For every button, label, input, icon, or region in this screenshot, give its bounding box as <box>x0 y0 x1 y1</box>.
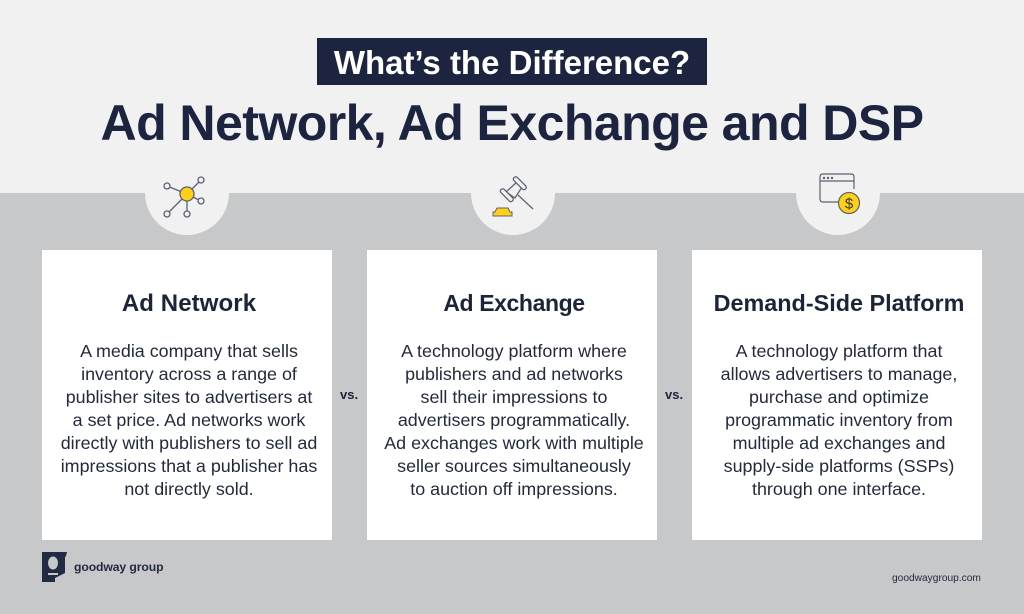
main title: Ad Network, Ad Exchange and DSP <box>101 95 923 151</box>
website url: goodwaygroup.com <box>892 573 981 584</box>
heading: ad exchange: Ad Exchange <box>443 290 585 316</box>
text: ad exchange description: A technology platform where <box>401 341 627 361</box>
text: ad network description: inventory across a range of <box>81 364 297 384</box>
header band <box>0 0 1024 193</box>
text: dsp description <box>721 341 957 499</box>
icon: browser with dollar coin: $ <box>845 196 854 212</box>
icon: network <box>145 176 229 235</box>
heading: demand-side platform: Demand-Side Platform <box>714 290 964 316</box>
panel: ad exchange <box>367 250 657 540</box>
text: dsp description: purchase and optimize <box>749 387 929 407</box>
text: ad network description: a set price. Ad networks work <box>73 410 305 430</box>
text: ad exchange description: seller sources simultaneously <box>397 456 631 476</box>
text: ad network description: publisher sites to advertisers at <box>66 387 312 407</box>
text: ad exchange description: Ad exchanges work with multiple <box>384 433 644 453</box>
text: ad network description: A media company that sells <box>80 341 298 361</box>
text: ad network description <box>61 341 317 499</box>
text: ad exchange description: sell their impressions to <box>421 387 607 407</box>
text: dsp description: multiple ad exchanges and <box>733 433 945 453</box>
text: ad exchange description <box>384 341 644 499</box>
icon: gavel <box>471 176 555 235</box>
text: dsp description: programmatic inventory from <box>725 410 953 430</box>
text: dsp description: through one interface. <box>752 479 926 499</box>
icon: browser with dollar coin <box>796 173 880 235</box>
text: ad network description: not directly sold. <box>124 479 254 499</box>
heading: ad network: Ad Network <box>122 290 256 317</box>
logo: goodway group <box>42 552 164 582</box>
text: ad network description: directly with publishers to sell ad <box>61 433 317 453</box>
logo wordmark: goodway group <box>74 560 163 574</box>
title badge: What’s the Difference? <box>334 44 690 81</box>
panel: demand-side platform <box>692 250 982 540</box>
text: ad exchange description: advertisers programmatically. <box>398 410 630 430</box>
text: ad network description: impressions that a publisher has <box>61 456 317 476</box>
text: dsp description: A technology platform that <box>736 341 942 361</box>
panel: ad network <box>42 250 332 540</box>
text: ad exchange description: to auction off impressions. <box>410 479 618 499</box>
vs label 1: vs. <box>340 387 358 402</box>
text: dsp description: allows advertisers to manage, <box>721 364 957 384</box>
logo mark <box>42 552 67 582</box>
text: ad exchange description: publishers and ad networks <box>405 364 623 384</box>
text: dsp description: supply-side platforms (SSPs) <box>724 456 954 476</box>
vs label 2: vs. <box>665 387 683 402</box>
